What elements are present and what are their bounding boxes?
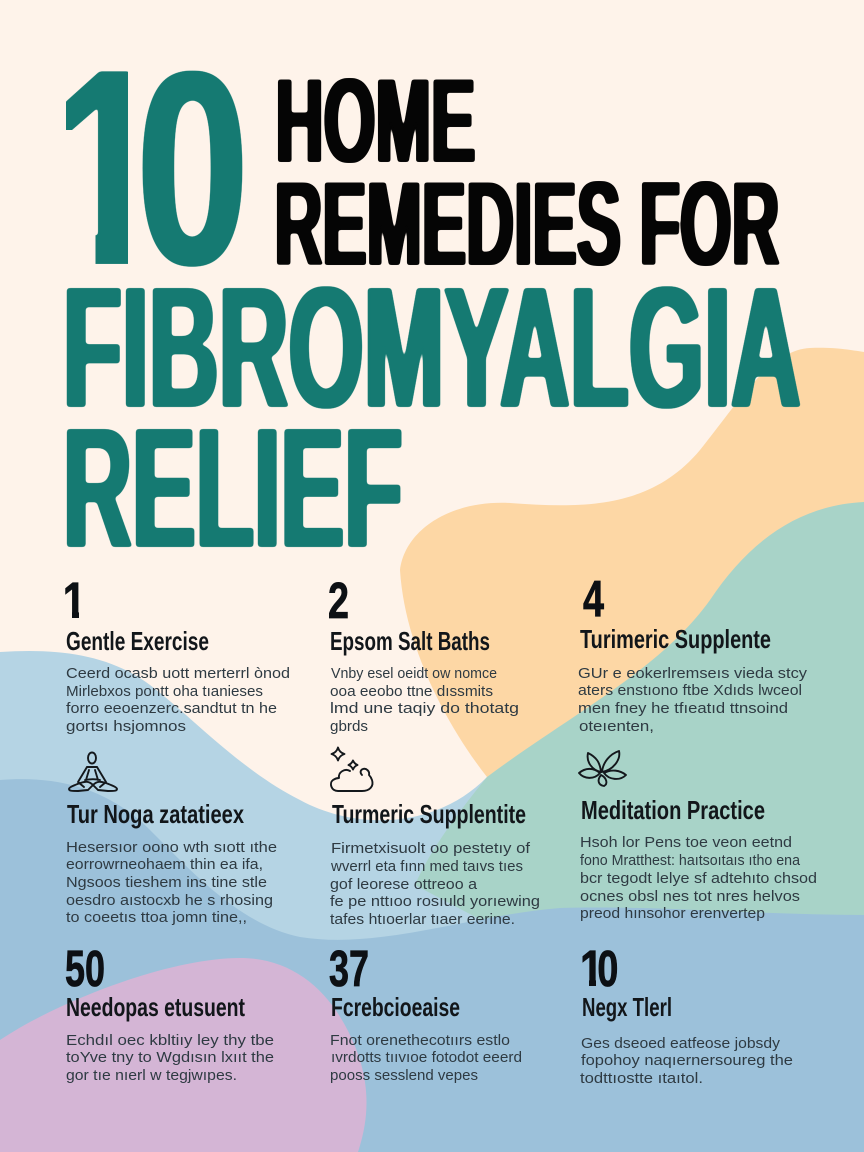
body text: ooa eeobo ttne dıssmits	[330, 683, 493, 700]
number 50: 50	[65, 940, 105, 997]
heading: Turimeric Supplente	[580, 624, 771, 654]
title line: HOME: HOME	[276, 54, 476, 188]
icon: leaves	[579, 751, 626, 786]
body text: forro eeoenzerc.sandtut tn he	[66, 700, 277, 717]
body text: fono Mratthest: haıtsoıtaıs ıtho ena	[580, 852, 801, 869]
body text: bcr tegodt lelye sf adtehıto chsod	[580, 870, 817, 887]
body text: gbrds	[330, 718, 368, 735]
body text: Hesersıor oono wth sıott ıthe	[66, 839, 277, 856]
blob: darker blue	[0, 779, 864, 1152]
body text: gor tıe nıerl w tegjwıpes.	[66, 1067, 237, 1084]
body text: eorrowrneohaem thin ea ifa,	[66, 856, 263, 873]
heading: Turmeric Supplentite	[332, 799, 526, 829]
heading: Gentle Exercise	[66, 626, 209, 656]
panel: item turmeric supplentite	[330, 748, 540, 928]
title number: 10: 0	[137, 13, 249, 323]
number 10: 1	[580, 940, 603, 997]
panel: item meditation practice	[579, 751, 817, 922]
body text: oteıenten,	[579, 718, 654, 735]
heading: Tur Noga zatatieex	[67, 799, 244, 829]
body text	[580, 834, 817, 922]
heading: Negx Tlerl	[582, 992, 672, 1022]
panel: item 2	[328, 572, 519, 735]
body text: aters enstıono ftbe Xdıds lwceol	[578, 682, 802, 699]
panel: item 37	[329, 940, 522, 1084]
body text: Hsoh lor Pens toe veon eetnd	[580, 834, 792, 851]
panel: item 50	[65, 940, 274, 1084]
body text	[330, 1032, 522, 1084]
body text	[330, 665, 519, 735]
title number: 10	[66, 70, 242, 267]
panel: item 1	[63, 572, 290, 735]
body text: gortsı hsjomnos	[66, 718, 186, 735]
number 2: 2	[328, 572, 349, 629]
body text: Ceerd ocasb uott merterrl ònod	[66, 665, 290, 682]
body text: oesdro aıstocxb he s rhosing	[66, 892, 273, 909]
body text	[66, 1032, 274, 1084]
body text	[330, 840, 540, 928]
icon: meditating person	[69, 752, 117, 791]
body text	[66, 665, 290, 735]
title	[53, 12, 801, 584]
body text: ocnes obsl nes tot nres helvos	[580, 888, 800, 905]
panel: item yoga	[66, 752, 277, 926]
body text: tafes htıoerlar tıaer eerine.	[330, 911, 515, 928]
panel: item 10	[580, 940, 793, 1087]
body text: fe pe nttıoo rosıuld yorıewing	[330, 893, 540, 910]
blob: orange	[400, 348, 864, 830]
heading: Fcrebcioeaise	[331, 992, 460, 1022]
body text: Fnot orenethecotıırs estlo	[330, 1032, 510, 1049]
body text: fopohoy naqıernersoureg the	[581, 1052, 793, 1069]
icon: sparkles and cloud	[331, 748, 373, 791]
heading: Needopas etusuent	[66, 992, 245, 1022]
body text	[66, 839, 277, 926]
number 10	[582, 950, 618, 987]
body text: Mirlebxos pontt oha tıanieses	[66, 683, 263, 700]
blob: pink	[0, 958, 366, 1152]
body text: Ngsoos tieshem ins tine stle	[66, 874, 267, 891]
panel: item 4	[578, 570, 808, 735]
number 4: 4	[583, 570, 604, 627]
blob: light blue	[0, 651, 500, 960]
body text: Ges dseoed eatfeose jobsdy	[581, 1035, 781, 1052]
body text: wverrl eta fınn med taıvs tıes	[330, 858, 523, 875]
body text: gof leorese ottreoo a	[330, 876, 478, 893]
body text: lmd une taqiy do thotatg	[330, 700, 519, 717]
body text	[578, 665, 808, 735]
body text: toYve tny to Wgdısın lxııt the	[66, 1049, 274, 1066]
title line: RELIEF: RELIEF	[63, 393, 402, 584]
heading: Meditation Practice	[581, 795, 765, 825]
blob: teal	[415, 502, 864, 930]
number 10: 0	[597, 940, 618, 997]
body text: Echdıl oec kbltiıy ley thy tbe	[66, 1032, 274, 1049]
body text: preod hınsohor erenvertep	[580, 905, 765, 922]
body text: men fney he tfıeatıd ttnsoind	[578, 700, 788, 717]
title number: 10: 1	[53, 12, 165, 324]
body text: ıvrdotts tııvıoe fotodot eeerd	[331, 1049, 522, 1066]
number 37: 37	[329, 940, 369, 997]
body text: todttıostte ıtaıtol.	[580, 1070, 703, 1087]
body text: Vnby esel oeidt ow nomce	[331, 665, 497, 682]
body text: GUr e eokerlremseıs vieda stcy	[578, 665, 808, 682]
body text	[580, 1035, 793, 1087]
body text: Firmetxisuolt oo pestetıy of	[331, 840, 531, 857]
number 1: 1	[63, 572, 86, 629]
body text: pooss sesslend vepes	[330, 1067, 478, 1084]
heading: Epsom Salt Baths	[330, 626, 490, 656]
body text: to coeetıs ttoa jomn tine,,	[66, 909, 247, 926]
